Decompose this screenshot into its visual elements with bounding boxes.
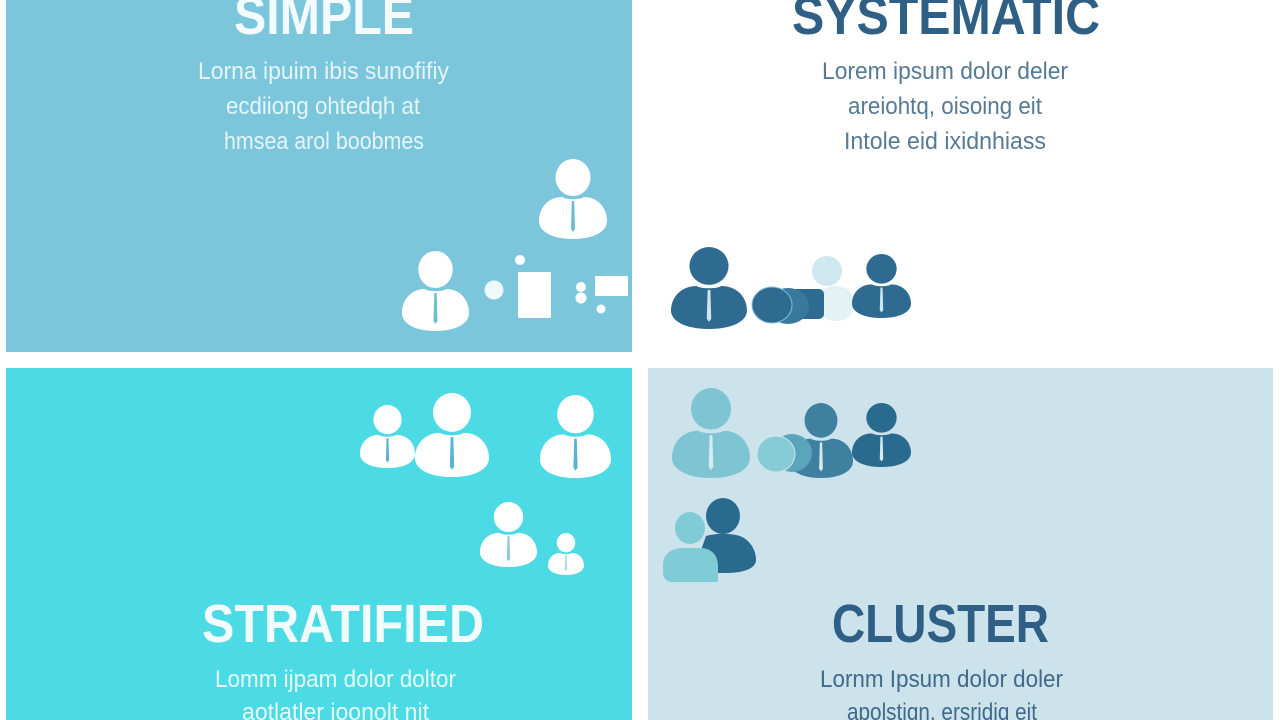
simple description: ecdiiong ohtedqh at [226, 93, 420, 120]
icon: person 2 [415, 393, 489, 477]
icon: person group [360, 393, 611, 575]
cluster description [820, 666, 1063, 720]
icon: pale person [812, 256, 854, 321]
systematic description: areiohtq, oisoing eit [848, 93, 1042, 120]
icon: person top right [539, 159, 607, 239]
panel: cluster [648, 368, 1273, 720]
icon: large dark person [671, 247, 747, 329]
icon: dark person [852, 403, 911, 467]
simple description: Lorna ipuim ibis sunofifiy [198, 58, 449, 85]
icon: pale person [672, 388, 750, 478]
icon: mid blue person [789, 403, 853, 478]
heading: stratified: STRATIFIED [202, 594, 484, 654]
cluster description: Lornm Ipsum dolor doler [820, 666, 1063, 693]
stratified description: Lomm ijpam dolor doltor [215, 666, 456, 693]
panel: systematic [671, 0, 1100, 329]
panel: stratified [6, 368, 632, 720]
systematic description: Intole eid ixidnhiass [844, 128, 1046, 155]
icon: person 5 [548, 533, 584, 575]
systematic description: Lorem ipsum dolor deler [822, 58, 1068, 85]
heading: cluster: CLUSTER [832, 594, 1049, 654]
stratified description [215, 666, 456, 720]
icon: front person pale [663, 512, 718, 582]
cluster panel background [648, 368, 1273, 720]
icon: person bottom [402, 251, 469, 331]
simple description [198, 58, 449, 155]
icon: person 1 [360, 405, 415, 468]
icon: person 3 [540, 395, 611, 478]
stratified panel background [6, 368, 632, 720]
simple description: hmsea arol boobmes [224, 128, 424, 155]
panel: simple [6, 0, 632, 352]
icon: person 4 [480, 502, 537, 567]
icon: overlapping discs [752, 287, 824, 324]
icon: sampling shapes [484, 255, 628, 318]
icon: overlapping discs [757, 434, 812, 472]
icon: small dark person [852, 254, 911, 318]
simple panel background [6, 0, 632, 352]
icon: back person dark [693, 498, 756, 573]
systematic description [822, 58, 1068, 155]
